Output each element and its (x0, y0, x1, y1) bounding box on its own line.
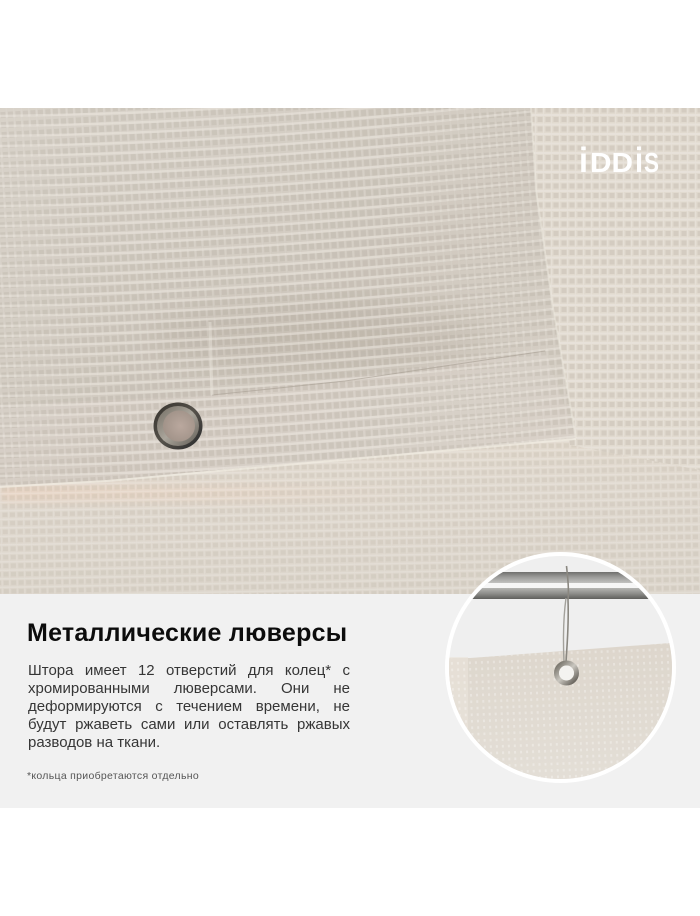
text block: description: разводов на ткани. (28, 734, 160, 751)
panel: text background (0, 594, 700, 808)
icon: metal eyelet (154, 402, 202, 450)
logo: iddis: i (635, 141, 643, 180)
chrome rod (472, 572, 648, 599)
text block: description (28, 662, 350, 751)
product photo and inset illustration (0, 108, 700, 783)
front curtain panel with hem (0, 108, 576, 488)
text block: description: будут ржаветь сами или оставлять ржавых (28, 716, 350, 733)
curtain fabric in inset (449, 643, 672, 779)
text block: description: Штора имеет 12 отверстий для колец* с (28, 662, 350, 679)
hem seam (212, 351, 545, 395)
icon: hook and ring (556, 566, 576, 683)
logo: iddis (581, 146, 658, 172)
text block: description: деформируются с течением времени, не (28, 698, 350, 715)
heading: Металлические люверсы (27, 619, 347, 647)
lower fabric layer (0, 430, 700, 594)
text block: description: хромированными люверсами. Они не (28, 680, 350, 697)
circle white border (445, 552, 676, 783)
logo: iddis: S (644, 147, 659, 178)
inset: circular rod and hook detail (445, 552, 680, 790)
logo: iddis: DD (590, 147, 633, 178)
photo: curtain fabric (0, 76, 700, 594)
footnote: *кольца приобретаются отдельно (27, 770, 199, 782)
right fabric layer (525, 108, 700, 470)
logo: iddis: i (579, 141, 588, 180)
